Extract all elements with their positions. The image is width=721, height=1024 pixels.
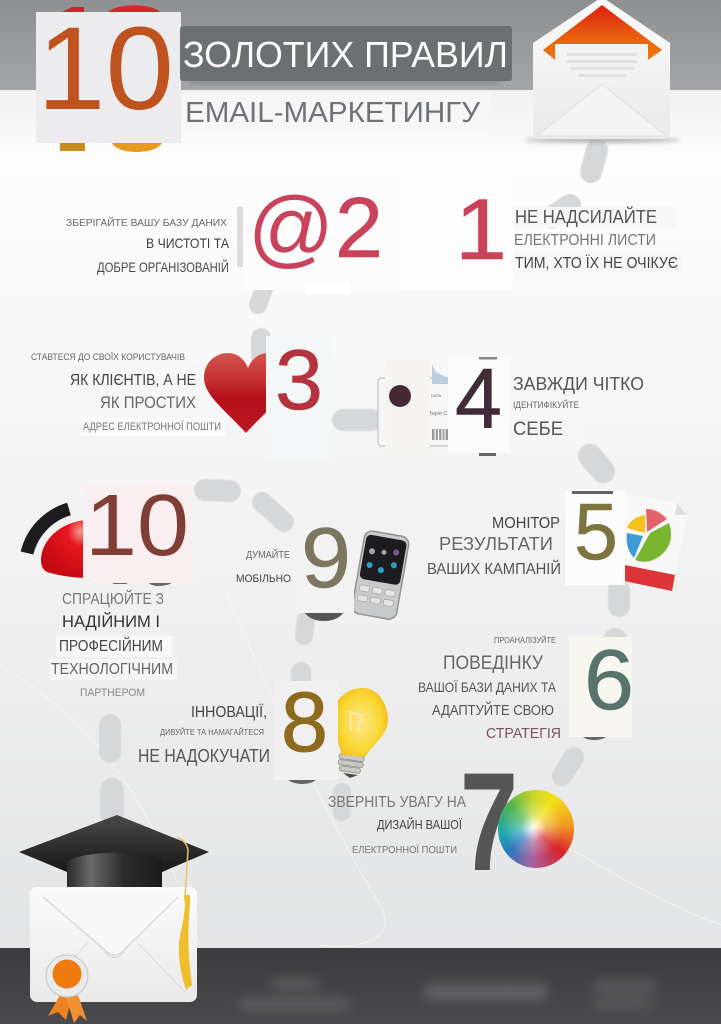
rule 4 text: ІДЕНТИФІКУЙТЕ [513,399,579,411]
numeral 7: 7 [460,743,518,900]
number box 3 [266,333,330,460]
rule 6 text: ПРОАНАЛІЗУЙТЕ [494,636,556,645]
panel: rule 6 [418,633,634,742]
rule 8 text: ІННОВАЦІЇ, [191,703,267,721]
panel: title [36,3,512,152]
icon: light bulb [337,688,388,778]
rule 8 text: НЕ НАДОКУЧАТИ [138,746,270,766]
rule 10 text: НАДІЙНИМ І [62,612,160,631]
rule 5 text: МОНІТОР [492,515,560,532]
icon: pie chart document [600,490,687,591]
icon: graduation envelope [19,815,209,1023]
number box 1: 1 [455,182,507,278]
shadow numerals behind title box [60,5,162,152]
panel: rule 5 [427,487,687,591]
rule 4 text: СЕБЕ [513,419,563,440]
medal with ribbons [46,955,88,1023]
number box 4: 4 [455,352,502,447]
graduation cap [19,815,209,887]
footer band [0,948,721,1024]
number box 5: 5 [574,487,618,576]
rule 6 text [418,636,561,742]
rule 10 text: ТЕХНОЛОГІЧНИМ [51,661,173,678]
panel: rule 8 [138,675,388,784]
card cover with dot [385,360,430,452]
envelope body [30,887,197,1002]
panel: rule 1 [400,178,683,290]
number box with at sign: 2 [335,181,383,276]
panel: rule 7 [328,743,574,900]
number box 8: 8 [281,675,328,769]
rule 8 text: ДИВУЙТЕ ТА НАМАГАЙТЕСЯ [160,728,264,737]
header band [0,0,721,90]
icon: id card: DATA [431,393,441,398]
rule 6 text: ПОВЕДІНКУ [443,653,544,674]
panel: rule 3 [31,333,330,460]
number box with at sign: @ [248,180,334,276]
rule 2 text: В ЧИСТОТІ ТА [146,235,230,251]
rule 8 text [138,703,270,766]
number box 8 [274,675,338,784]
rule 4 text: ЗАВЖДИ ЧІТКО [513,373,644,394]
panel: rule 9 [236,511,410,621]
dashed route path [110,150,619,812]
icon: open envelope [524,0,680,142]
rule 3 text: ЯК ПРОСТИХ [100,393,196,412]
icon: heart [204,353,288,433]
icon: id card [378,364,453,446]
number box 6 [569,633,634,740]
rule 1 text: ТИМ, ХТО ЇХ НЕ ОЧІКУЄ [515,254,678,272]
rule 3 text: ЯК КЛІЄНТІВ, А НЕ [70,372,196,389]
rule 7 text: ЕЛЕКТРОННОЇ ПОШТИ [352,844,457,856]
rule 1 text: ЕЛЕКТРОННІ ЛИСТИ [514,232,656,249]
number box 10: 10 [85,477,189,574]
rule 1 text: НЕ НАДСИЛАЙТЕ [515,206,657,227]
number box 1 [400,178,513,290]
icon: colour wheel [498,790,574,868]
number box 5 [565,487,625,585]
number box 4 [448,352,510,456]
rule 4 text [512,373,644,441]
rule 9 text: ДУМАЙТЕ [246,548,290,561]
title line 1 [180,26,512,84]
rule 10 text: ПАРТНЕРОМ [80,687,145,699]
number box 9: 9 [301,511,351,606]
rule 6 text: ВАШОЇ БАЗИ ДАНИХ ТА [418,679,557,695]
title line 2: EMAIL-МАРКЕТИНГУ [185,97,481,129]
rule 10 text: СПРАЦЮЙТЕ З [62,589,164,608]
footer blurred contacts [240,980,656,1008]
rule 2 text: ЗБЕРІГАЙТЕ ВАШУ БАЗУ ДАНИХ [66,216,227,229]
rule 5 text: ВАШИХ КАМПАНІЙ [427,559,561,578]
icon: red gauge [27,509,90,578]
title line 1: ЗОЛОТИХ ПРАВИЛ [183,34,508,75]
panel: rule 10 [27,477,193,699]
rule 2 text: ДОБРЕ ОРГАНІЗОВАНІЙ [97,258,229,275]
rule 7 text: ЗВЕРНІТЬ УВАГУ НА [328,794,466,811]
rule 5 text: РЕЗУЛЬТАТИ [439,534,553,554]
icon: id card: Марія С [427,411,447,417]
number box 3: 3 [275,333,323,428]
rule 2 text [66,216,230,275]
tassel [177,838,192,990]
rule 3 text [31,352,226,436]
panel: rule 2 [66,180,400,294]
rule 3 text: СТАВТЕСЯ ДО СВОЇХ КОРИСТУВАЧІВ [31,352,185,363]
title number box: 10 [37,3,174,135]
number box with at sign [237,180,400,294]
number box 9 [295,511,354,621]
rule 7 text: ДИЗАЙН ВАШОЇ [377,817,462,832]
rule 1 text [513,206,683,273]
rule 6 text: АДАПТУЙТЕ СВОЮ [432,701,554,719]
rule 7 text [328,794,466,856]
background curves [0,590,721,946]
number box 6: 6 [584,633,634,728]
rule 10 text [50,589,177,699]
rule 3 text: АДРЕС ЕЛЕКТРОННОЇ ПОШТИ [83,421,221,433]
rule 6 text: СТРАТЕГІЯ [486,725,561,742]
icon: mobile phone [351,530,410,620]
rule 9 text [236,548,291,585]
panel: rule 4 [378,352,644,456]
rule 5 text [427,515,561,578]
rule 9 text: МОБІЛЬНО [236,573,291,585]
rule 10 text: ПРОФЕСІЙНИМ [59,636,163,655]
